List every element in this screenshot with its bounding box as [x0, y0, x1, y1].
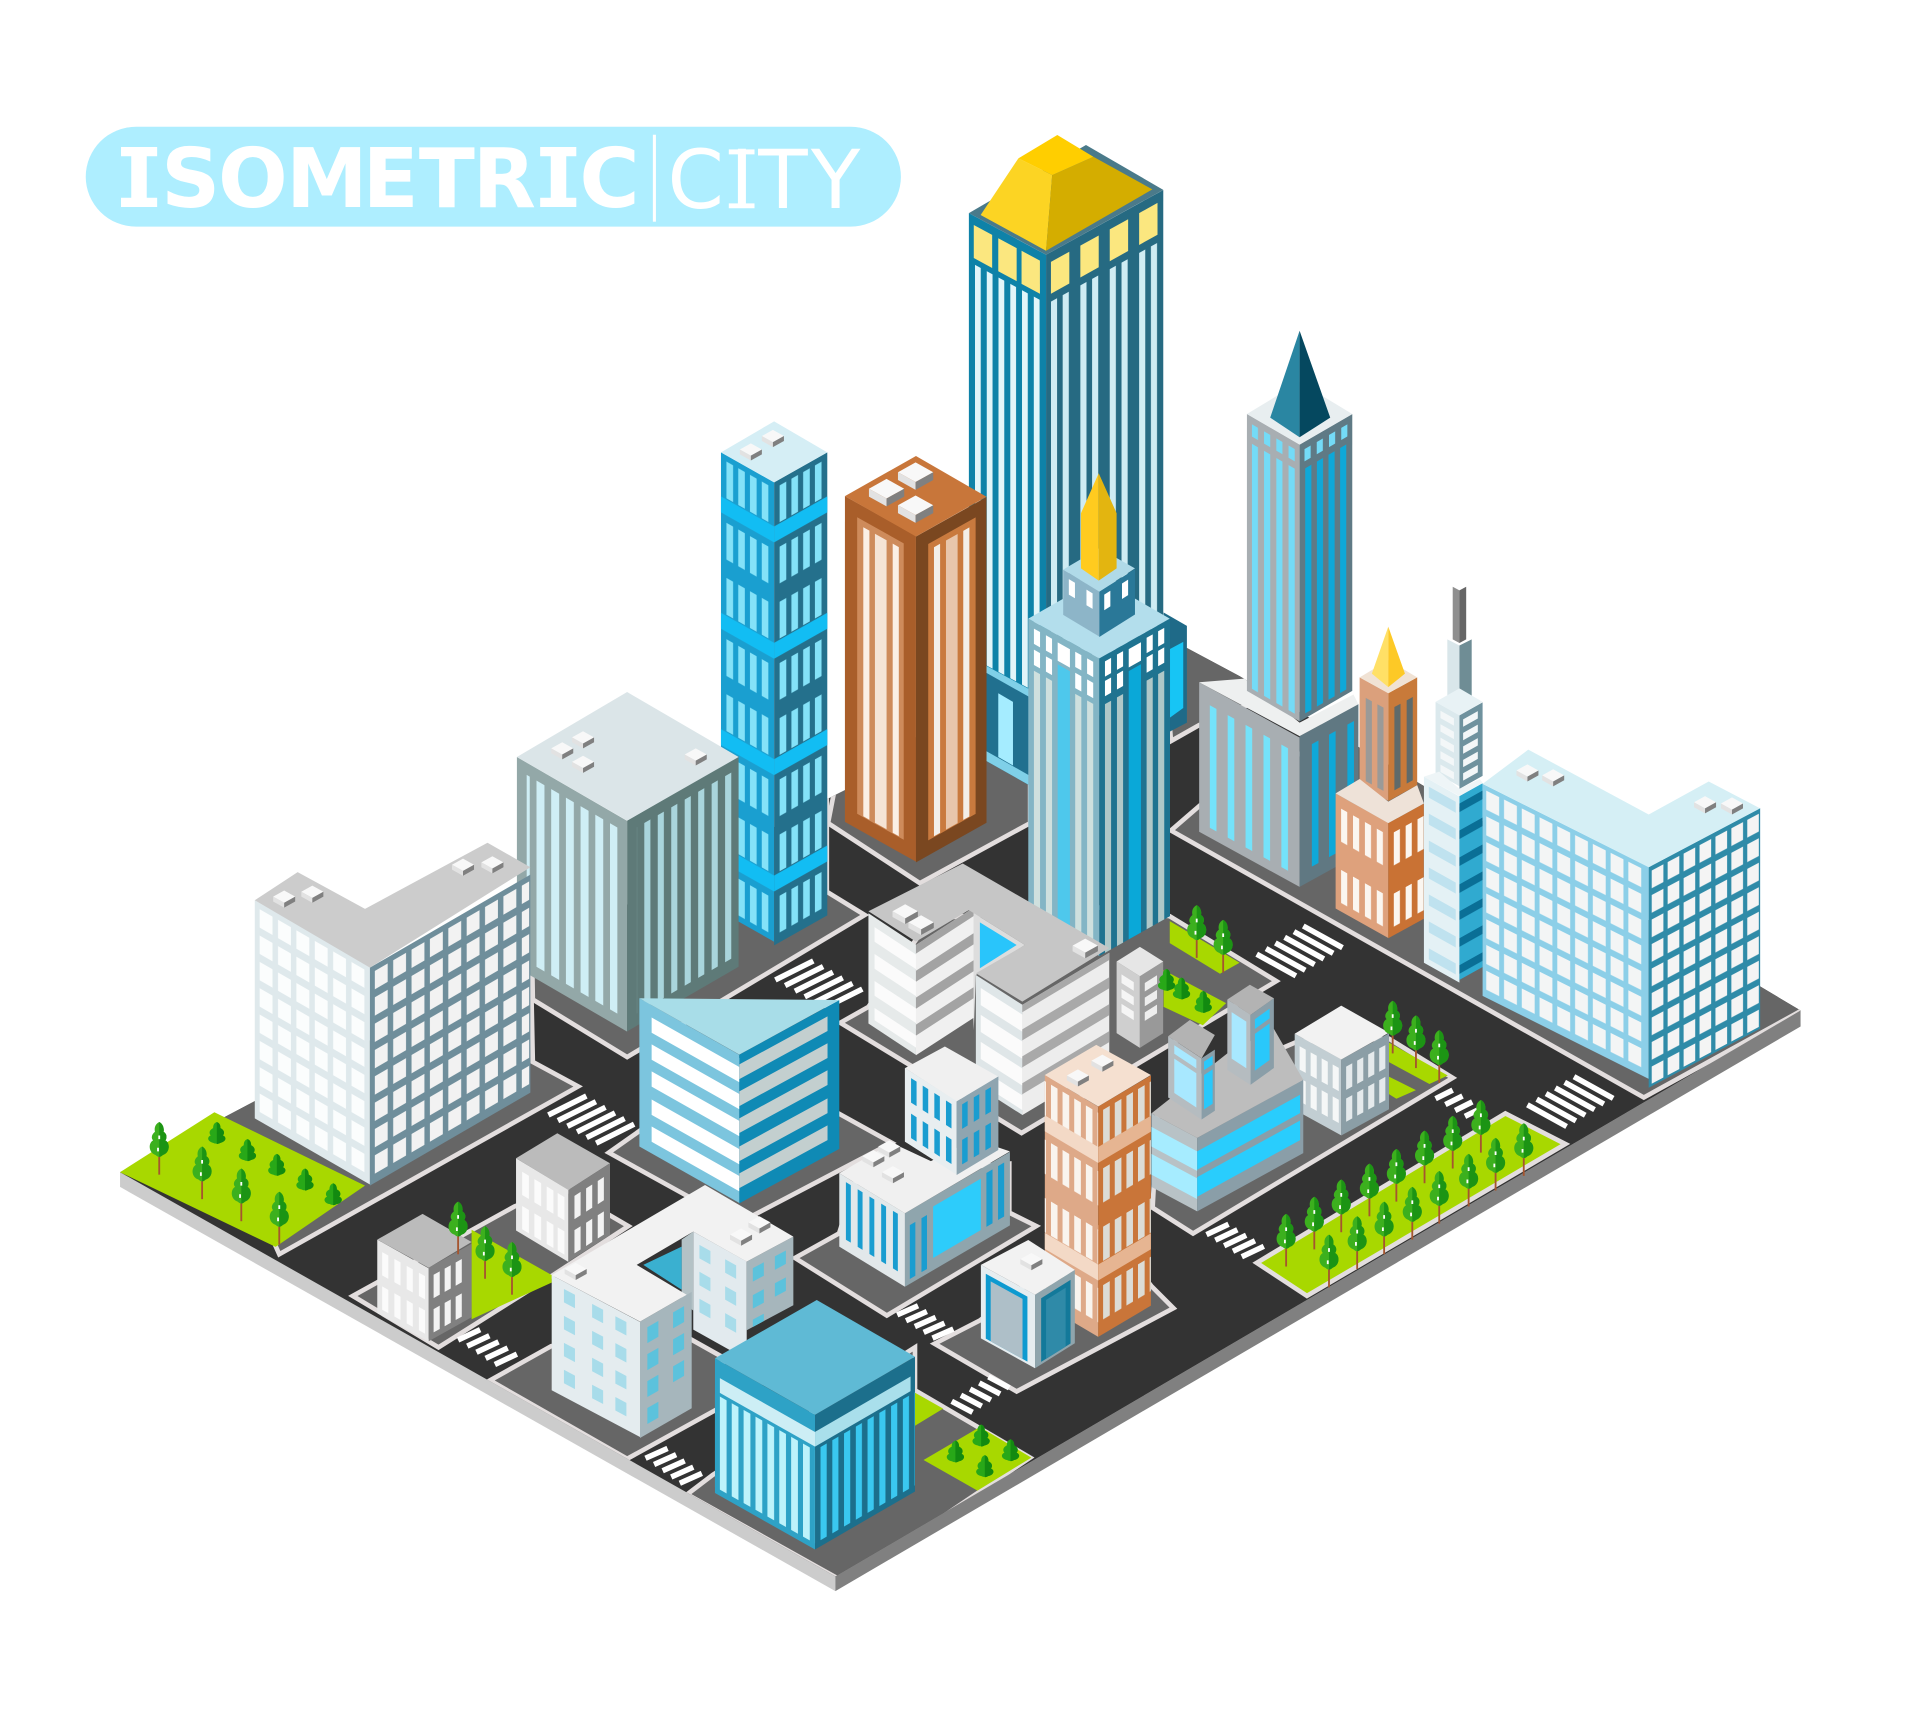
blue striped building — [639, 998, 839, 1203]
lawn patches — [120, 921, 1448, 1491]
ground blocks and lawns — [214, 643, 1813, 1583]
white L-shaped building — [255, 843, 530, 1186]
crosswalks — [458, 926, 1613, 1483]
building with blue windows upper — [905, 1047, 998, 1175]
tall teal tower with yellow roof — [969, 135, 1163, 745]
title badge: CITY — [668, 134, 861, 228]
orange spire tower — [1336, 627, 1424, 938]
spire tower podium — [1199, 679, 1358, 887]
upper tier redraw over roof — [905, 1068, 998, 1175]
central tower — [1028, 473, 1170, 956]
spire tower — [1247, 331, 1352, 721]
platform base — [120, 648, 1801, 1591]
factory with chimneys — [1151, 985, 1303, 1211]
building with blue windows lower — [839, 1068, 1010, 1287]
brown tower — [845, 456, 987, 862]
title badge — [86, 127, 901, 228]
white building with blue courtyard — [552, 1185, 793, 1438]
grey-green office block — [517, 692, 739, 1032]
orange tall building — [1045, 1045, 1151, 1337]
small grey building by tower — [1117, 947, 1163, 1048]
isometric city infographic — [86, 126, 1801, 1592]
big blue box building — [715, 1300, 915, 1550]
right large light-blue building — [1483, 750, 1760, 1088]
small blue-framed building — [981, 1240, 1075, 1368]
trees — [150, 905, 1533, 1477]
small grey-white building — [1295, 1006, 1389, 1135]
small grey building two — [377, 1214, 472, 1342]
title badge: ISOMETRIC — [124, 132, 640, 227]
small grey building one — [516, 1133, 610, 1262]
thin white tower — [1424, 587, 1483, 983]
central L-shaped white building — [868, 864, 1109, 1115]
blue segmented tower — [721, 421, 827, 945]
podium of tall teal tower — [984, 612, 1187, 786]
